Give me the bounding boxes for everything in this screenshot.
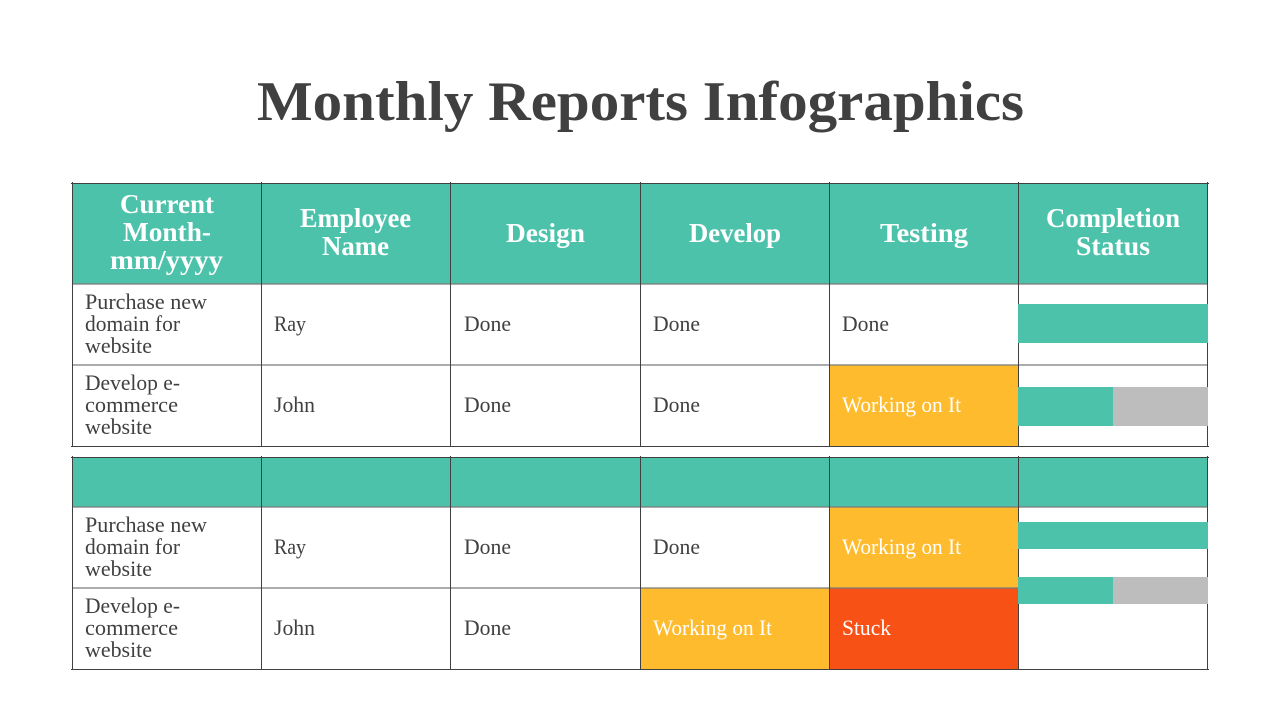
row: develop e-commerce: Develop e- [85, 370, 180, 395]
row: purchase new domain: website [85, 333, 152, 358]
header row: bottom table [72, 457, 1208, 507]
progress bar: full [1018, 522, 1208, 549]
row: develop e-commerce: Working on It [842, 392, 961, 417]
row: develop e-commerce: John [274, 615, 315, 640]
header row: top table: mm/yyyy [110, 245, 224, 275]
row: develop e-commerce: John [274, 392, 315, 417]
header row: top table: Name [322, 231, 389, 261]
header row: top table [72, 183, 1208, 284]
row: purchase new domain: Done [464, 534, 511, 559]
row: purchase new domain: Purchase new [85, 289, 207, 314]
row: develop e-commerce: website [85, 637, 152, 662]
row: develop e-commerce: website [85, 414, 152, 439]
row: develop e-commerce: Done [464, 392, 511, 417]
header row: top table: Develop [689, 218, 781, 248]
row: develop e-commerce: Done [464, 615, 511, 640]
row: purchase new domain: Done [842, 311, 889, 336]
row: develop e-commerce: Develop e- [85, 593, 180, 618]
header row: top table: Status [1076, 231, 1150, 261]
row: develop e-commerce: Stuck [842, 615, 891, 640]
header row: top table: Completion [1046, 203, 1180, 233]
row: purchase new domain: domain for [85, 311, 181, 336]
row: purchase new domain: Purchase new [85, 512, 207, 537]
row: purchase new domain: Done [464, 311, 511, 336]
header row: top table: Month- [123, 217, 211, 247]
row: purchase new domain: Ray [274, 534, 306, 559]
row: purchase new domain: Done [653, 534, 700, 559]
row: purchase new domain [85, 507, 1019, 588]
row: purchase new domain: Working on It [842, 534, 961, 559]
row: develop e-commerce [85, 365, 1019, 446]
title: Monthly Reports Infographics [257, 71, 1024, 133]
header row: top table: Current [120, 189, 214, 219]
row: develop e-commerce: Done [653, 392, 700, 417]
header row: top table: Employee [300, 203, 411, 233]
row: purchase new domain: domain for [85, 534, 181, 559]
panel: bottom table [71, 456, 1209, 670]
header row: top table: Design [506, 218, 585, 248]
row: purchase new domain: Done [653, 311, 700, 336]
progress bar: full [1018, 304, 1208, 343]
row: purchase new domain: Ray [274, 311, 306, 336]
row: develop e-commerce: commerce [85, 615, 178, 640]
row: develop e-commerce: Working on It [653, 615, 772, 640]
panel: top table [71, 182, 1209, 447]
row: develop e-commerce: commerce [85, 392, 178, 417]
progress bar: half [1018, 577, 1208, 604]
row: purchase new domain [85, 289, 889, 358]
row: develop e-commerce [85, 588, 1019, 669]
progress bar: half [1018, 387, 1208, 426]
header row: top table: Testing [880, 218, 969, 248]
row: purchase new domain: website [85, 556, 152, 581]
